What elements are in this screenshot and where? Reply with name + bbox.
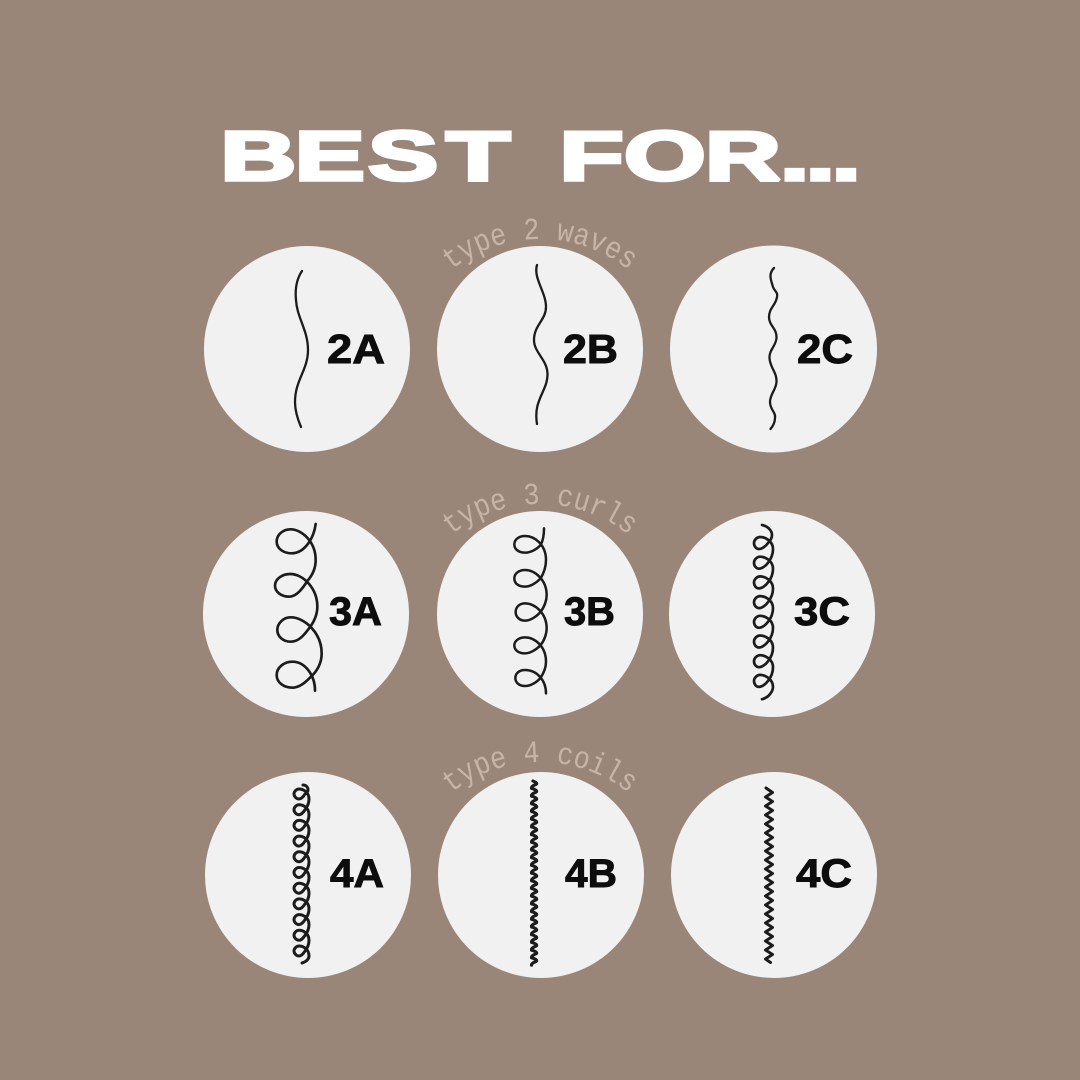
title: FOR... bbox=[560, 116, 861, 195]
title bbox=[220, 116, 861, 195]
panel: 4A bbox=[205, 772, 411, 978]
icon: 4B coil bbox=[532, 781, 537, 965]
title: BEST bbox=[220, 116, 510, 195]
label: 2A: 2A bbox=[327, 326, 385, 372]
icon: 3A curl bbox=[275, 524, 322, 691]
panel: 4C bbox=[671, 772, 877, 978]
icon: 4C zigzag bbox=[766, 788, 772, 962]
curved heading: type 2 waves: type 2 waves bbox=[444, 218, 635, 268]
icon: 3B curl bbox=[514, 528, 547, 693]
panel: 3A bbox=[203, 511, 409, 717]
label: 3C: 3C bbox=[794, 590, 850, 634]
curved heading: type 3 curls: type 3 curls bbox=[444, 484, 635, 532]
curved heading: type 4 coils: type 4 coils bbox=[444, 742, 635, 790]
panel: 2C bbox=[670, 246, 877, 452]
panel: 2B bbox=[437, 246, 643, 452]
label: 2B: 2B bbox=[563, 326, 618, 372]
label: 3B: 3B bbox=[564, 590, 615, 634]
panel: 2A bbox=[204, 246, 410, 452]
icon: 4A coil bbox=[294, 785, 309, 963]
icon: 3C curl bbox=[754, 525, 773, 699]
label: 2C: 2C bbox=[797, 326, 853, 372]
icon: 2C wave bbox=[769, 268, 777, 429]
label: 4C: 4C bbox=[796, 852, 852, 896]
icon: 2A wave bbox=[295, 271, 308, 427]
panel: 3C bbox=[669, 511, 875, 717]
panel: 3B bbox=[437, 511, 643, 717]
label: 4B: 4B bbox=[565, 852, 617, 896]
panel: 4B bbox=[438, 772, 644, 978]
icon: 2B wave bbox=[534, 265, 548, 424]
label: 3A: 3A bbox=[329, 590, 382, 634]
label: 4A: 4A bbox=[330, 852, 384, 896]
